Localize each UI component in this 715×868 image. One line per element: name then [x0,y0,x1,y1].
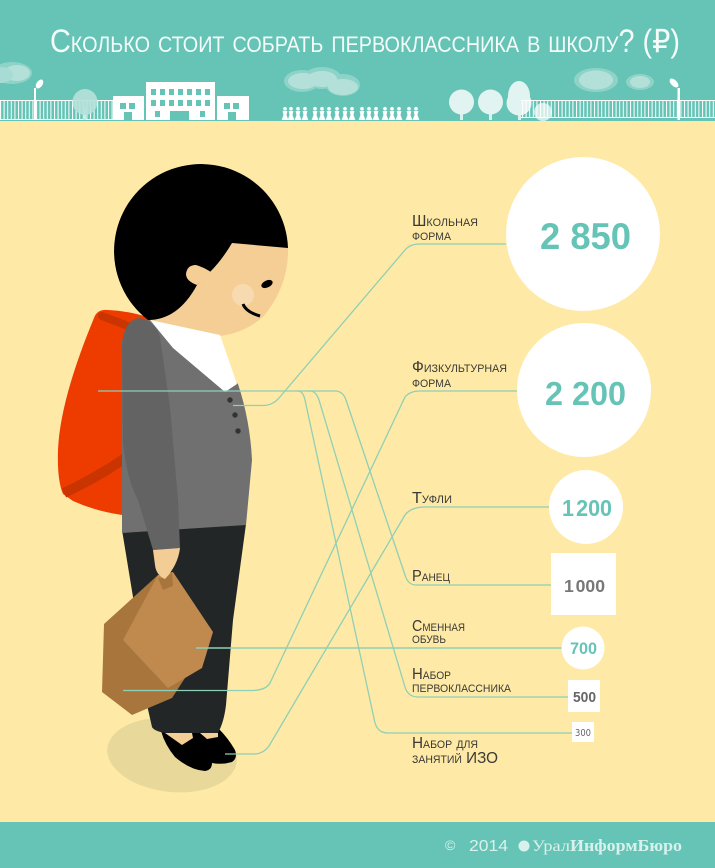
footer credit: 2014 [469,838,508,855]
fence left [0,100,113,120]
item: art kit: занятий ИЗО [412,750,498,767]
collar [150,320,237,392]
line: school uniform [233,244,506,406]
eye [260,278,274,290]
item: first-grader kit: Набор [412,666,451,683]
footer band [0,822,715,868]
buttons [227,397,241,434]
footer credit: © [445,837,456,853]
item: school uniform: Школьная [412,213,478,230]
arm [122,318,180,550]
item: school uniform: 2 850 [540,216,631,257]
item: backpack [412,553,616,615]
item: art kit: Набор для [412,735,478,752]
item: change shoes [412,618,604,670]
footer credit: Урал [532,838,570,855]
footer credit: ИнформБюро [570,836,682,855]
shoes [161,729,236,771]
item: shoes: Туфли [412,490,452,507]
lamp left [34,78,45,120]
item: backpack: 1 000 [564,576,605,596]
item: first-grader kit: 500 [573,689,596,706]
item: PE uniform: форма [412,374,452,391]
cloud centre [284,67,360,96]
shadow [103,711,241,799]
line: art kit [296,391,572,733]
vest [122,319,252,533]
item: school uniform: форма [412,227,452,244]
hand [153,548,180,579]
boy figure [58,164,288,799]
item: change shoes: обувь [412,630,446,647]
line: backpack [98,391,551,585]
row of children [282,107,419,120]
item: shoes: 1 200 [562,495,612,521]
school [113,82,249,120]
trees right [449,81,552,121]
backpack [58,310,179,515]
connector lines [98,244,572,754]
header band [0,0,715,121]
line: PE uniform [123,391,517,690]
fence right [521,100,715,118]
item: first-grader kit: первоклассника [412,679,512,696]
clouds right [574,68,654,92]
item: PE uniform: 2 200 [545,375,626,412]
item: change shoes: 700 [570,639,597,658]
skyline illustration [0,62,715,121]
item: art kit [412,722,594,767]
footer credit [445,836,682,855]
face [150,240,288,336]
clouds left [0,62,32,84]
item: PE uniform: Физкультурная [412,359,507,376]
trousers [122,524,246,733]
item: art kit: 300 [575,728,591,739]
hair [114,164,288,320]
ear [186,265,211,285]
tree left [72,89,98,120]
mouth [243,304,260,316]
cheek [232,284,254,306]
item: backpack: Ранец [412,568,450,585]
item: school uniform [412,157,660,311]
item: change shoes: Сменная [412,618,465,635]
bag [102,572,213,715]
line: first-grader kit [308,391,568,697]
lamp right [668,77,680,120]
item: shoes [412,470,623,544]
line: change shoes [196,647,562,649]
line: shoes [225,507,549,754]
item: first-grader kit [412,666,600,712]
item: PE uniform [412,323,651,457]
